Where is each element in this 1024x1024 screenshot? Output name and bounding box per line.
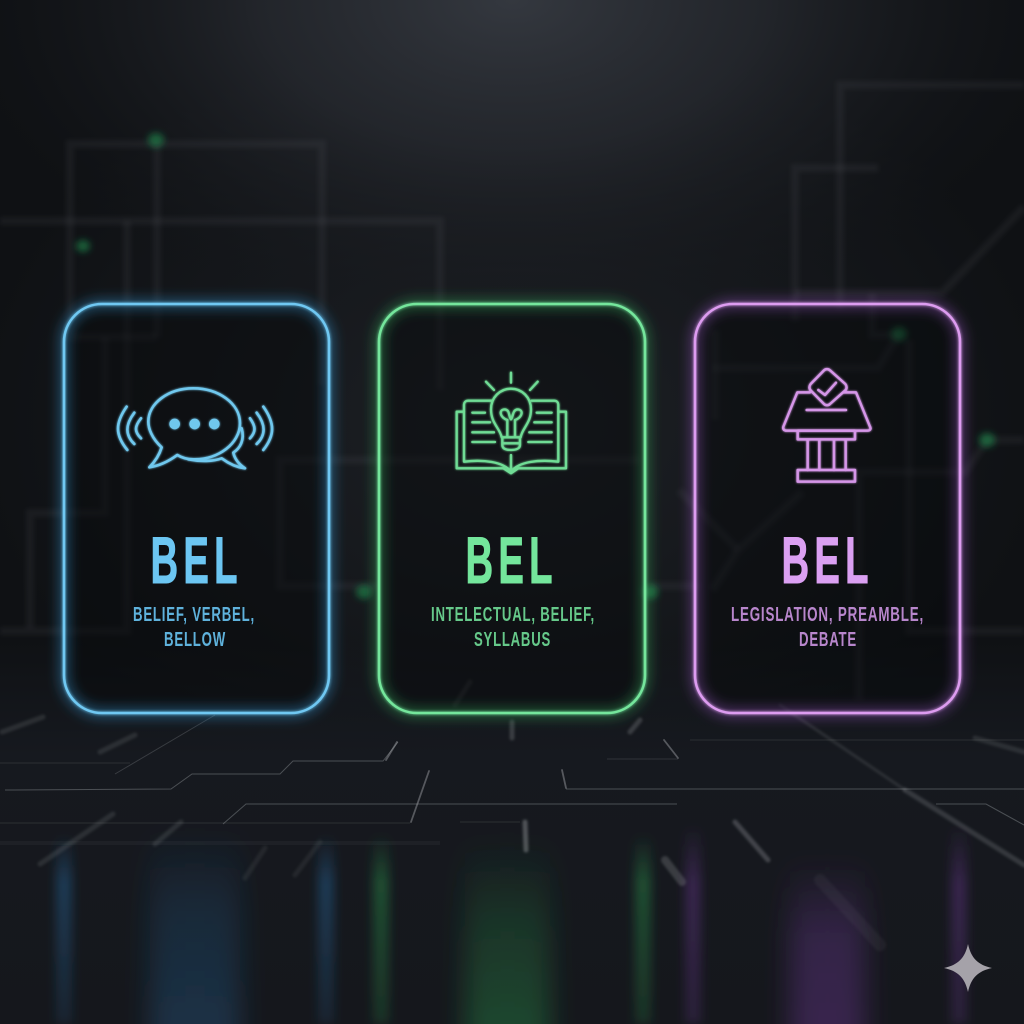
text: related words	[133, 604, 255, 651]
icon: sparkle	[944, 944, 992, 992]
purple card glass	[695, 304, 960, 713]
icon: speech bubbles with sound waves	[118, 388, 272, 468]
background circuit lines	[0, 85, 1024, 700]
text: related words: INTELECTUAL, BELIEF,	[431, 604, 595, 626]
panel: blue card	[64, 304, 329, 713]
blue card glass	[64, 304, 329, 713]
text: related words: BELLOW	[164, 629, 226, 651]
heading: BEL: BEL	[782, 524, 874, 598]
purple card halo	[695, 304, 960, 713]
floor reflections	[56, 825, 967, 1024]
heading: BEL: BEL	[466, 524, 558, 598]
text: related words: BELIEF, VERBEL,	[133, 604, 255, 626]
green card frame	[379, 304, 645, 713]
green card halo	[379, 304, 645, 713]
icon: ballot box on podium	[783, 369, 871, 482]
purple card frame	[695, 304, 960, 713]
blue card halo	[64, 304, 329, 713]
text: related words	[731, 604, 924, 651]
text: related words: DEBATE	[799, 629, 857, 651]
blue card frame	[64, 304, 329, 713]
panel: purple card	[695, 304, 960, 713]
text: related words: SYLLABUS	[474, 629, 551, 651]
icon: open book with light bulb	[457, 373, 566, 473]
green card glass	[379, 304, 645, 713]
heading: BEL: BEL	[150, 524, 243, 598]
floor circuit traces	[0, 682, 1024, 945]
text: related words: LEGISLATION, PREAMBLE,	[731, 604, 924, 626]
text: related words	[431, 604, 595, 651]
glowing nodes	[76, 133, 995, 599]
panel: green card	[379, 304, 645, 713]
